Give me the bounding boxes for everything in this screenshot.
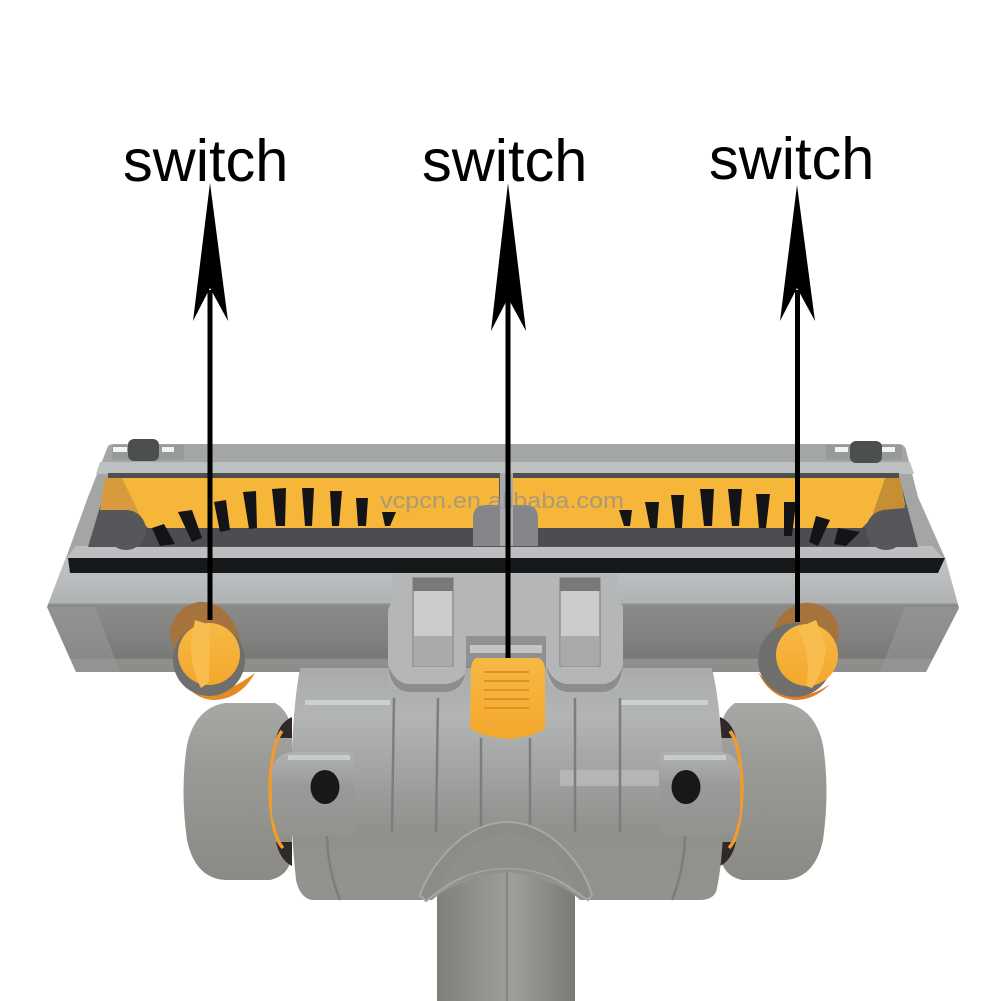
left label: switch [123,127,288,194]
centre belt housing [473,505,538,546]
right switch knob [758,620,838,700]
bristles [152,488,860,546]
head top plate [66,439,945,559]
right wheel [720,703,826,880]
neck arch collar [420,822,592,901]
right top clip [826,441,902,463]
right axle clamp [659,752,740,836]
brush roller right end [866,510,906,550]
brush window with yellow backing [88,473,918,550]
vacuum floor brush product [47,439,959,1001]
neck tube [437,870,575,1001]
head front housing [47,557,959,673]
lit housing underside centre [300,668,712,673]
central drum body [291,668,724,900]
callout: right switch [709,125,874,622]
callout: centre switch [422,127,587,658]
drum highlight centre [560,770,690,786]
left knob rear ring [170,602,244,655]
centre label: switch [422,127,587,194]
drum highlight left [305,700,390,705]
left top clip [112,439,184,461]
left switch knob [173,620,255,700]
right knob rear ring [768,603,839,655]
callout: left switch [123,127,288,620]
centre yellow pedal [470,658,545,739]
centre arrow [491,183,526,658]
brush roller left end [106,510,146,550]
black slot [68,558,945,573]
left wheel [184,703,292,880]
left arrow [193,183,228,620]
right label: switch [709,125,874,192]
left axle clamp [272,752,354,836]
watermark: vcpcn.en.alibaba.com [380,488,624,513]
drum highlight right [620,700,708,705]
drum ribs [327,698,685,900]
right arrow [780,185,815,622]
central clip frame [388,574,623,692]
